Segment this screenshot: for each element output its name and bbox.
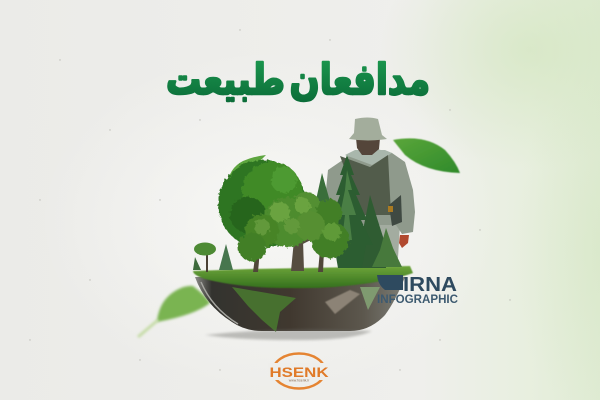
leaf: bottom left blurred: [138, 286, 210, 337]
bowl earth: [195, 277, 405, 340]
continent right: [360, 287, 380, 310]
shadow: [205, 329, 372, 340]
IRNA logo block: [377, 275, 403, 290]
small tree left: [194, 242, 216, 272]
bowl highlight: [201, 282, 238, 324]
large conifer: [327, 155, 373, 268]
leaf: top right: [393, 138, 460, 173]
branches: [272, 232, 324, 244]
IRNA text: IRNA: [403, 273, 457, 296]
back conifers: [310, 173, 402, 268]
soldier pouch: [389, 195, 402, 226]
canopy: [238, 192, 349, 261]
soldier: [325, 118, 415, 258]
soldier pouch tag: [388, 206, 393, 212]
logo name: HSENK: [270, 364, 328, 380]
rock highlights: [325, 290, 360, 314]
large round tree: [218, 160, 306, 248]
title: مدافعان طبیعت: [166, 55, 430, 104]
soldier shoulder highlight: [345, 150, 392, 165]
small conifers left: [193, 244, 233, 270]
infographic text: INFOGRAPHIC: [377, 294, 458, 306]
soldier hand: [399, 235, 409, 248]
soldier hat: [349, 118, 387, 140]
leaf: top left: [227, 155, 266, 186]
trunk: [291, 240, 304, 271]
soldier tactical vest: [340, 155, 391, 215]
soldier torso: [325, 148, 415, 234]
central tree: [238, 192, 349, 272]
soldier neck and head: [356, 138, 380, 155]
IRNA watermark: [377, 273, 458, 306]
soldier legs: [372, 225, 400, 258]
logo background band: [268, 363, 330, 380]
HSENK logo: [268, 354, 330, 388]
continent: [232, 287, 296, 332]
grass rim: [193, 266, 413, 288]
logo url: www.hsenk.ir: [289, 378, 310, 382]
logo ellipse: [273, 354, 325, 388]
